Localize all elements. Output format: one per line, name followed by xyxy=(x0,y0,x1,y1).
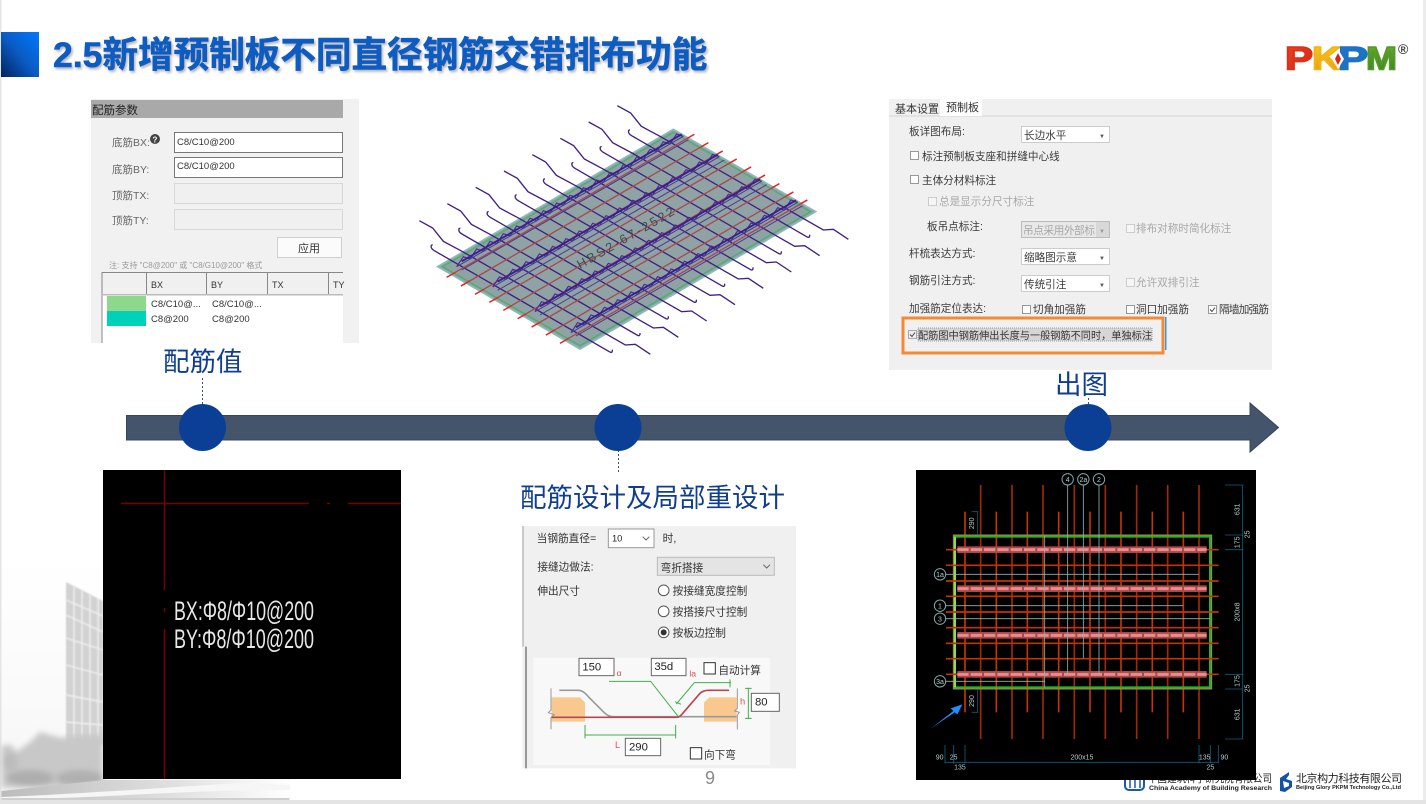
dimension labels: 135 xyxy=(954,764,966,771)
top TY field: 顶筋TY: xyxy=(112,214,149,227)
diameter select: 10 xyxy=(612,533,622,543)
layout select: 长边水平 xyxy=(1024,130,1067,142)
lap bend diagram: h xyxy=(740,696,745,706)
dimension labels: 200x15 xyxy=(1071,754,1094,761)
PKPM logo: ® xyxy=(1398,41,1409,57)
lap bend diagram: α xyxy=(617,668,622,678)
reinforcement options: 切角加强筋 xyxy=(1033,303,1086,316)
3D precast slab with rebar xyxy=(419,106,848,354)
checkbox: material: 主体分材料标注 xyxy=(922,174,997,187)
icon: academy logo xyxy=(1125,776,1144,790)
PKPM logo: M xyxy=(1366,40,1397,76)
panel: rebar parameters dialog xyxy=(91,99,359,343)
highlighted option xyxy=(903,317,1166,353)
lap bend diagram: 290 xyxy=(629,742,648,754)
callout labels: 3 xyxy=(938,616,942,623)
format note: 注: 支持 "C8@200" 或 "C8/G10@200" 格式 xyxy=(109,260,262,270)
dimension labels: 90 xyxy=(1220,754,1228,761)
apply button xyxy=(278,238,342,258)
dialog title bar xyxy=(91,100,343,118)
dimension labels: 200x8 xyxy=(1234,602,1241,622)
lifting point select: 板吊点标注: xyxy=(927,220,983,233)
callout labels: 3a xyxy=(936,679,944,686)
tabs xyxy=(889,99,1272,116)
rebar table: BY xyxy=(211,280,223,290)
panel: rebar lap settings xyxy=(522,526,796,768)
bottom BY field xyxy=(112,158,342,178)
panel: precast slab settings dialog xyxy=(889,99,1272,370)
dimension labels: 25 xyxy=(1245,684,1252,692)
lap bend diagram: 35d xyxy=(654,661,673,673)
PKPM logo: K xyxy=(1312,40,1342,76)
joint method select: 弯折搭接 xyxy=(661,561,704,574)
leader select xyxy=(909,274,1200,292)
label: drawing output: 出图 xyxy=(1055,370,1108,400)
lap bend diagram: la xyxy=(689,669,696,679)
dimension labels: 175 xyxy=(1234,536,1241,548)
dimension labels: 25 xyxy=(1245,530,1252,538)
bottom BY field: C8/C10@200 xyxy=(177,161,235,172)
layout select: ▼ xyxy=(1099,134,1105,140)
top TX field xyxy=(112,184,342,204)
dimension labels: 25 xyxy=(1206,764,1214,771)
label: design and redesign: 配筋设计及局部重设计 xyxy=(520,483,785,513)
panel: CAD rebar annotation xyxy=(103,470,401,779)
annotation BY: BY:Φ8/Φ10@200 xyxy=(174,624,314,654)
top TX field: 顶筋TX: xyxy=(112,189,149,202)
checkbox: centerline: 标注预制板支座和拼缝中心线 xyxy=(922,150,1060,163)
page number: 9 xyxy=(705,768,715,788)
red axis lines xyxy=(121,470,401,779)
vertical bars xyxy=(981,485,1199,739)
lattice trusses xyxy=(457,134,803,336)
callout labels: 2a xyxy=(1079,477,1087,484)
extension radio options: 按接缝宽度控制 xyxy=(673,585,747,598)
footer organisation logos: China Academy of Building Research xyxy=(1149,786,1272,792)
truss expression select: 缩略图示意 xyxy=(1024,251,1077,264)
dimension labels: 631 xyxy=(1234,503,1241,515)
timeline node 2 xyxy=(594,404,642,451)
horizontal bars xyxy=(946,550,1219,674)
bottom BX field xyxy=(112,132,342,152)
slab mark text: HBS2-67-2522 xyxy=(575,205,677,272)
lap bend diagram xyxy=(533,658,779,765)
lifting point select: ▼ xyxy=(1099,229,1105,235)
extension radio options xyxy=(537,585,747,640)
reinforcement options: 加强筋定位表达: xyxy=(909,302,986,315)
slab body xyxy=(438,129,816,349)
joint method select: 接缝边做法: xyxy=(537,561,594,574)
footer organisation logos: 北京构力科技有限公司 xyxy=(1296,771,1402,785)
rebar table: TX xyxy=(272,280,284,290)
lifting point select xyxy=(927,220,1232,238)
footer organisation logos: Beijing Glory PKPM Technology Co.,Ltd xyxy=(1296,785,1401,791)
callout labels: 4 xyxy=(1066,477,1070,484)
timeline node 1 xyxy=(179,404,226,451)
dimension labels: 290 xyxy=(969,695,976,707)
purple cross bars xyxy=(419,106,848,354)
background building photo xyxy=(2,558,290,800)
lifting point select: 排布对称时简化标注 xyxy=(1136,222,1232,235)
dimension labels: 290 xyxy=(969,517,976,529)
panel: CAD reinforcement drawing xyxy=(916,470,1256,780)
callout labels xyxy=(936,477,1101,686)
lattice truss bands xyxy=(957,546,1207,678)
timeline node 3 xyxy=(1064,404,1112,451)
bottom BX field: 底筋BX: xyxy=(112,136,150,149)
timeline arrow xyxy=(126,403,1278,452)
slab outline xyxy=(954,535,1211,689)
diameter select: 时, xyxy=(663,532,676,545)
dialog title bar: 配筋参数 xyxy=(92,103,138,117)
apply button: 应用 xyxy=(298,241,320,255)
leader select: 钢筋引注方式: xyxy=(909,274,976,287)
title: 2.5新增预制板不同直径钢筋交错排布功能 xyxy=(53,35,707,75)
dimension labels: 175 xyxy=(1234,675,1241,687)
tabs: 预制板 xyxy=(946,100,979,114)
rebar table: BX xyxy=(151,280,163,290)
truss expression select: 杆梳表达方式: xyxy=(909,247,976,260)
highlighted option: 配筋图中钢筋伸出长度与一般钢筋不同时，单独标注 xyxy=(918,329,1152,342)
title marker square xyxy=(1,32,39,77)
diameter select xyxy=(537,529,676,548)
PKPM logo: P xyxy=(1338,40,1368,76)
dimension labels: 25 xyxy=(950,754,958,761)
reinforcement options xyxy=(909,302,1269,316)
rebar table: TY xyxy=(333,280,345,290)
PKPM logo: P xyxy=(1285,40,1313,76)
footer organisation logos: 中国建筑科学研究院有限公司 xyxy=(1148,771,1272,785)
rebar table: C8/C10@... xyxy=(151,299,201,310)
truss expression select: ▼ xyxy=(1099,256,1105,262)
dimension labels: 631 xyxy=(1234,708,1241,720)
top TY field xyxy=(112,210,342,230)
diameter select: 当钢筋直径= xyxy=(537,532,596,545)
extension radio options: 伸出尺寸 xyxy=(537,585,580,598)
bottom BX field: C8/C10@200 xyxy=(177,137,235,148)
rebar table: C8@200 xyxy=(212,314,250,325)
layout select: 板详图布局: xyxy=(909,125,965,138)
rebar table xyxy=(102,272,345,343)
callout labels: 1a xyxy=(936,572,944,579)
lap bend diagram: L xyxy=(615,740,620,750)
reinforcement options: 隔墙加强筋 xyxy=(1219,303,1269,316)
dimension lines xyxy=(945,485,1243,763)
joint method select xyxy=(537,557,774,575)
red long bars xyxy=(447,134,807,343)
annotation BX: BX:Φ8/Φ10@200 xyxy=(174,596,314,626)
rebar table: C8@200 xyxy=(151,314,189,325)
dimension labels: 90 xyxy=(936,754,944,761)
reinforcement options: 洞口加强筋 xyxy=(1136,303,1189,316)
icon: glory logo xyxy=(1280,772,1292,792)
leader lines xyxy=(946,485,1210,688)
PKPM logo xyxy=(1285,40,1409,76)
dimension labels: 135 xyxy=(1199,754,1211,761)
connector dotted lines xyxy=(202,378,1088,472)
callout labels: 2 xyxy=(1097,477,1101,484)
lap bend diagram: 向下弯 xyxy=(704,749,736,762)
callout circles xyxy=(934,474,1105,687)
footer organisation logos xyxy=(1125,771,1402,792)
leader select: ▼ xyxy=(1099,283,1105,289)
arrow: blue pointer xyxy=(931,704,962,728)
lap bend diagram: 150 xyxy=(582,662,601,674)
bottom BY field: 底筋BY: xyxy=(112,163,149,176)
extension radio options: 按搭接尺寸控制 xyxy=(673,606,747,619)
callout labels: 1 xyxy=(938,603,942,610)
rebar table: C8/C10@... xyxy=(212,299,262,310)
lifting point select: 吊点采用外部标 xyxy=(1023,224,1095,237)
leader select: 允许双排引注 xyxy=(1136,276,1200,289)
label: rebar value: 配筋值 xyxy=(163,347,242,377)
dimension labels xyxy=(936,503,1252,771)
layout select xyxy=(909,125,1110,142)
leader select: 传统引注 xyxy=(1024,278,1067,291)
truss expression select xyxy=(909,247,1110,264)
lap bend diagram: 自动计算 xyxy=(718,664,761,677)
checkbox: dimensions: 总是显示分尺寸标注 xyxy=(939,195,1035,208)
extension radio options: 按板边控制 xyxy=(673,627,726,640)
tabs: 基本设置 xyxy=(895,102,939,116)
lap bend diagram: 80 xyxy=(755,697,768,709)
bottom BX field: ? xyxy=(152,136,158,144)
